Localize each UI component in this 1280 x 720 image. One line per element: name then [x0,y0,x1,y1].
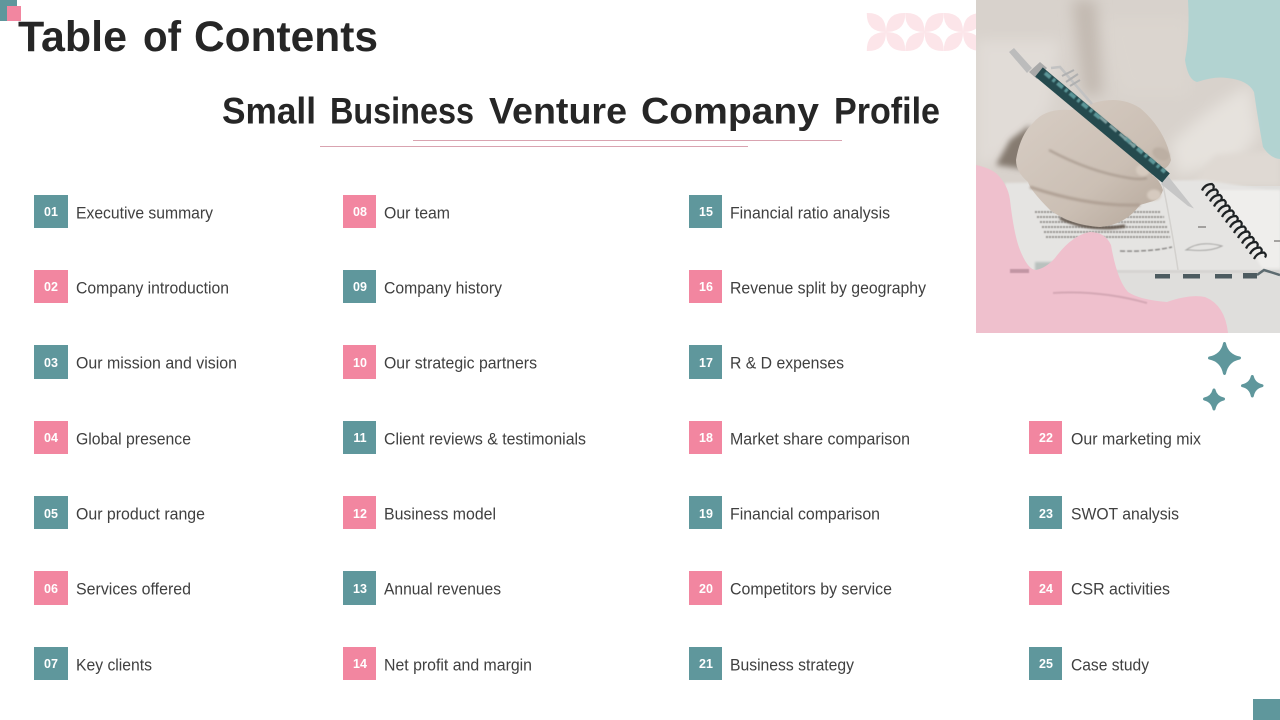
item 21 [689,647,855,680]
item 24: 24 [1039,582,1053,596]
item 13: Annual revenues [384,580,501,598]
item 18 [689,421,910,454]
item 23: 23 [1039,507,1053,521]
item 13 [343,571,501,605]
item 14 [343,647,532,680]
pen [1009,48,1194,208]
icon: large star [1210,344,1240,374]
item 21: 21 [699,657,713,671]
item 20: 20 [699,582,713,596]
item 09: 09 [353,280,367,294]
item 04 [34,421,191,454]
item 08 [343,195,450,228]
item 11 [343,421,586,454]
subtitle: Business [330,90,474,132]
item 05: Our product range [76,504,205,524]
item 03: Our mission and vision [76,354,237,372]
item 07: Key clients [76,656,152,674]
item 03 [34,345,237,379]
column 1 [34,195,237,680]
item 22 [1029,421,1202,454]
item 14: Net profit and margin [384,656,532,674]
item 05 [34,496,205,529]
item 13: 13 [353,582,367,596]
item 10 [343,345,537,379]
item 06 [34,571,191,605]
subtitle: Small [222,90,316,132]
column 4 [1029,421,1202,680]
item 17: 17 [699,356,713,370]
item 01: 01 [44,205,58,219]
item 12: 12 [353,507,367,521]
item 24: CSR activities [1071,580,1170,598]
title [18,14,378,61]
item 23: SWOT analysis [1071,504,1179,524]
item 16: Revenue split by geography [730,278,927,298]
subtitle: Venture [489,90,627,132]
photo: hand writing in a notebook [976,0,1280,333]
sparkle icons [1204,344,1262,409]
item 22: Our marketing mix [1071,430,1202,448]
item 01 [34,195,214,228]
item 08: Our team [384,204,450,222]
teal blob overlay [1185,0,1280,159]
item 11: 11 [353,431,367,445]
item 16: 16 [699,280,713,294]
item 20 [689,571,892,605]
item 02 [34,270,229,303]
item 04: Global presence [76,430,191,448]
item 15: Financial ratio analysis [730,204,890,222]
item 06: Services offered [76,580,191,598]
subtitle: Profile [834,90,940,132]
item 11: Client reviews & testimonials [384,430,586,448]
item 10: Our strategic partners [384,354,537,372]
item 19: 19 [699,507,713,521]
item 05: 05 [44,507,58,521]
decorative pink petal pattern [867,13,982,51]
item 25: 25 [1039,657,1053,671]
item 18: 18 [699,431,713,445]
item 19 [689,496,880,529]
hand [1016,100,1172,228]
item 09 [343,270,503,303]
item 24 [1029,571,1170,605]
item 12: Business model [384,504,496,524]
item 25: Case study [1071,656,1150,674]
item 01: Executive summary [76,204,214,222]
pink blob overlay [976,165,1228,333]
item 12 [343,496,496,529]
column 2 [343,195,586,680]
icon: medium star [1242,376,1262,396]
item 21: Business strategy [730,656,855,674]
corner accent: bottom right square [1253,699,1280,720]
item 07: 07 [44,657,58,671]
title: Table [18,14,127,61]
item 25 [1029,647,1150,680]
item 15: 15 [699,205,713,219]
subtitle [222,90,940,132]
item 09: Company history [384,278,503,298]
subtitle underline [320,140,842,146]
item 18: Market share comparison [730,430,910,448]
item 03: 03 [44,356,58,370]
item 07 [34,647,152,680]
item 20: Competitors by service [730,580,892,598]
item 23 [1029,496,1179,529]
title: of [143,14,182,61]
subtitle: Company [641,90,819,132]
item 19: Financial comparison [730,504,880,524]
item 04: 04 [44,431,58,445]
item 17 [689,345,844,379]
item 08: 08 [353,205,367,219]
icon: small star [1204,390,1224,409]
corner accent: top left squares [0,0,21,21]
item 10: 10 [353,356,367,370]
sweater background [976,0,1280,186]
item 22: 22 [1039,431,1053,445]
item 17: R & D expenses [730,354,844,372]
notebook spiral [1202,184,1266,259]
item 06: 06 [44,582,58,596]
column 3 [689,195,927,680]
title: Contents [194,14,378,61]
item 16 [689,270,927,303]
item 15 [689,195,890,228]
table and notebook [976,180,1280,333]
item 02: Company introduction [76,278,229,298]
item 02: 02 [44,280,58,294]
item 14: 14 [353,657,367,671]
